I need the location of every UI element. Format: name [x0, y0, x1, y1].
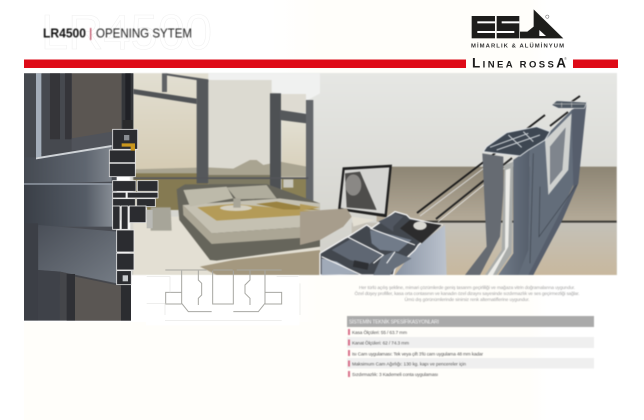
bed throw [197, 204, 320, 221]
outer face [395, 225, 447, 275]
right window profile [465, 101, 587, 275]
technical drawing [146, 270, 300, 325]
red rule left [24, 60, 466, 68]
bottom chamber [322, 258, 358, 275]
mid profile cap [483, 127, 550, 156]
intro text [354, 285, 580, 302]
middle chamber [370, 230, 412, 252]
ghost model number: LR4500 [41, 6, 212, 60]
framed portrait [338, 165, 392, 217]
window views [133, 73, 208, 187]
floor [352, 223, 617, 275]
spec header [347, 316, 594, 327]
row stripes [347, 337, 594, 348]
wall lower band [377, 167, 617, 222]
panel: door profile close-up [24, 73, 133, 321]
red rule right [573, 60, 618, 68]
section cut [109, 120, 158, 220]
row text: Isı Cam uygulaması: Tek veya çift 3'lü cam uygulama 48 mm kadar [352, 352, 483, 356]
city [133, 173, 208, 210]
front profile [320, 212, 447, 275]
skyline [133, 160, 307, 177]
room wall [130, 73, 617, 275]
row text: Kanat Ölçüleri: 62 / 74.3 mm [352, 340, 409, 346]
outline [320, 212, 442, 275]
glazing bars [417, 96, 580, 222]
intro text: Ümü dış görünümlerinde sinirsiz renk alternatiflerine uygundur. [404, 296, 530, 302]
title: LR4500 [43, 26, 86, 40]
logo caption: MİMARLIK & ALÜMİNYUM [471, 42, 564, 50]
lower chamber [332, 239, 382, 265]
panel: technical specifications: SİSTEMİN TEKNİK SPESİFİKASYONLARI [349, 318, 439, 326]
logo: ESA [472, 9, 563, 38]
upper chamber [378, 213, 403, 232]
door leaf top [24, 73, 133, 153]
bed end [300, 208, 352, 245]
row text: Kasa Ölçüleri: 55 / 63.7 mm [352, 329, 407, 335]
row text [352, 329, 483, 377]
window frames [133, 89, 197, 104]
bed mattress [183, 198, 320, 233]
right chamber [373, 252, 412, 275]
brand: Linea Rossa: ® [564, 56, 567, 61]
row text: Maksimum Cam Ağırlığı: 130 kg. kapı ve pencereler için [352, 362, 466, 366]
top profile cap [552, 101, 587, 108]
lower section cut [113, 206, 153, 285]
title: | [89, 26, 92, 40]
drawing backdrop [146, 275, 299, 325]
row markers [348, 329, 350, 377]
row text: Sızdırmazlık: 3 Kademeli conta uygulaması [352, 372, 438, 377]
floor [133, 217, 320, 275]
panel: room photo [130, 73, 617, 275]
title: OPENING SYTEM [96, 26, 192, 40]
title [43, 26, 192, 40]
ceiling [133, 73, 320, 101]
brand: Linea Rossa: L INEA ROSSA [472, 56, 566, 70]
pillows [183, 187, 233, 207]
glass holder [400, 220, 442, 243]
door rails [24, 146, 112, 184]
panel: technical specifications [347, 316, 594, 377]
intro text: Her türlü açılış şekline, mimari çözümlerde geniş tasarım geçirliliği ve mağaza vitrin doğramalarına uygundur. [359, 285, 575, 290]
right wall [300, 165, 617, 275]
lower cream tint [24, 322, 324, 420]
bed base [177, 184, 320, 261]
intro text: Özel düşey profiller, kasa orta contasının ve kanadın özel dizaynı sayesinde sızdırmazlık ve ses geçirmezliği sağlar. [354, 290, 580, 296]
tray [220, 205, 252, 211]
nightstand [151, 207, 172, 231]
wall between windows [208, 80, 272, 170]
door lower panel [60, 272, 131, 321]
